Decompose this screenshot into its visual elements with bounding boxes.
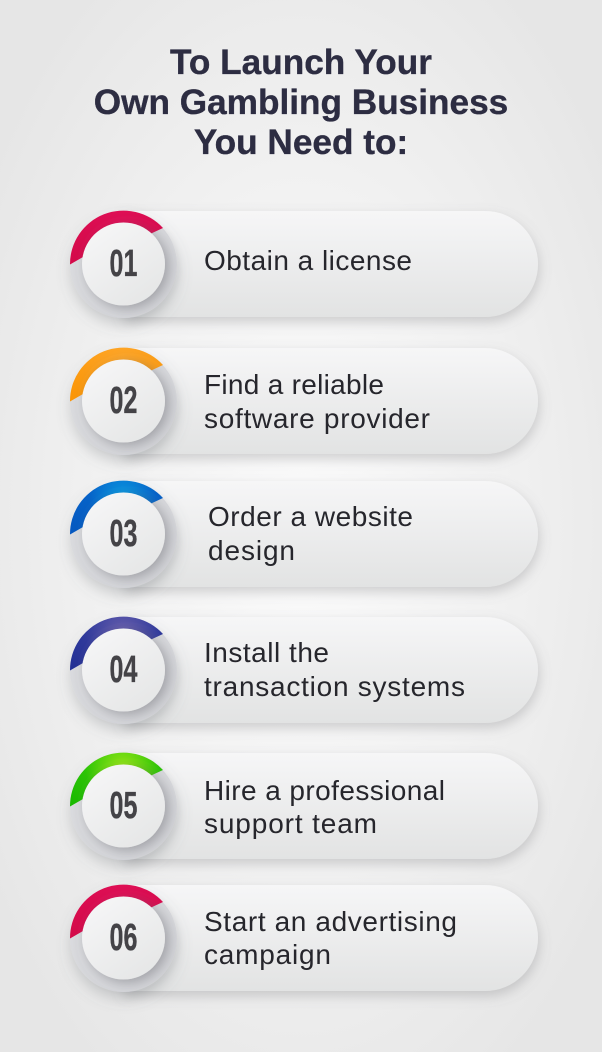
pill: step 05	[123, 753, 538, 859]
pill: step 06	[123, 885, 538, 991]
label: step 06: Start an advertising	[204, 906, 457, 937]
ring: step 05	[70, 753, 177, 860]
label: step 06	[204, 906, 457, 970]
number 06: 06	[110, 916, 137, 958]
ring: step 02	[70, 348, 177, 455]
title: To Launch Your	[170, 43, 432, 82]
number 02: 02	[110, 379, 137, 421]
number 05: 05	[110, 784, 137, 826]
pill: step 02	[123, 348, 538, 454]
label: step 04: transaction systems	[204, 671, 465, 702]
pill: step 04	[123, 617, 538, 723]
title	[94, 43, 508, 162]
step 01	[70, 211, 538, 318]
number 04: 04	[110, 648, 137, 690]
step 02	[70, 348, 538, 455]
number 03: 03	[110, 512, 137, 554]
step 04	[70, 617, 538, 724]
number 01: 01	[110, 242, 137, 284]
label: step 04	[204, 637, 465, 702]
title: You Need to:	[194, 123, 408, 162]
step 06	[70, 885, 538, 992]
label: step 03	[208, 501, 413, 566]
ring: step 03	[70, 481, 177, 588]
title: Own Gambling Business	[94, 83, 508, 122]
label: step 03: design	[208, 535, 295, 566]
label: step 03: Order a website	[208, 501, 413, 532]
label: step 02	[204, 369, 430, 434]
step 03	[70, 481, 538, 588]
step 05	[70, 753, 538, 860]
label: step 02: software provider	[204, 403, 430, 434]
label: step 02: Find a reliable	[204, 369, 384, 400]
ring: step 06	[70, 885, 177, 992]
label: step 01: Obtain a license	[204, 245, 412, 276]
label: step 04: Install the	[204, 637, 329, 668]
pill: step 03	[123, 481, 538, 587]
label: step 05: Hire a professional	[204, 775, 445, 806]
ring: step 04	[70, 617, 177, 724]
pill: step 01	[123, 211, 538, 317]
label: step 05	[204, 775, 445, 839]
label: step 06: campaign	[204, 939, 331, 970]
label: step 05: support team	[204, 808, 377, 839]
ring: step 01	[70, 211, 177, 318]
